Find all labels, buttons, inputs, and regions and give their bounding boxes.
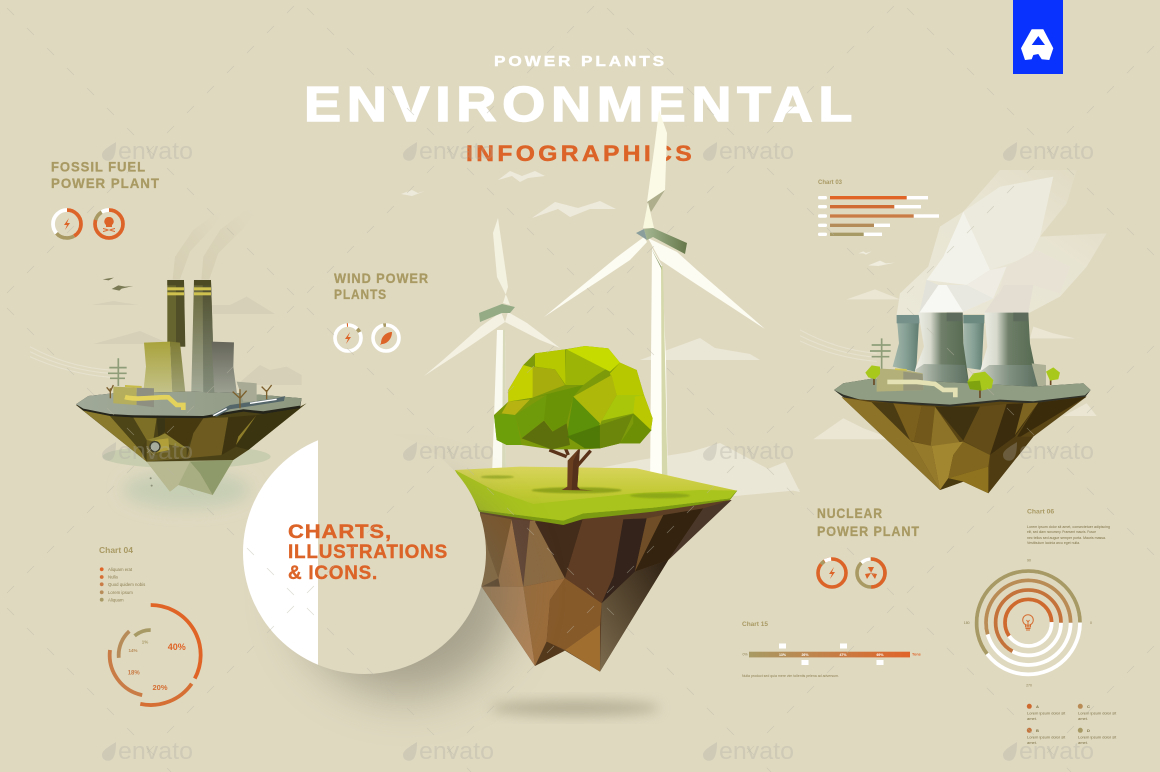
- rings: [977, 571, 1080, 674]
- arcs: [110, 605, 201, 705]
- callout text: ILLUSTRATIONS: [288, 541, 448, 563]
- bare trees: [107, 385, 272, 408]
- arc labels: 18%: [128, 670, 140, 676]
- legend: Lorem ipsum dolor sit: [1027, 734, 1066, 740]
- clouds: [813, 289, 1097, 439]
- rock facets: [83, 408, 300, 462]
- heading: wind power plants: WIND POWER: [334, 270, 429, 286]
- pylon: [108, 358, 127, 386]
- watermark: envato: envato: [118, 138, 193, 165]
- legend: Aliquam erat: [108, 567, 133, 572]
- legend: D: [1087, 728, 1090, 733]
- background mountains: [92, 297, 302, 385]
- legend: Lorem ipsum: [108, 590, 133, 595]
- subtitle: infographics: INFOGRAPHICS: [466, 141, 695, 166]
- ground shadows: [481, 475, 690, 498]
- smoke: [173, 205, 260, 279]
- legend: B: [1036, 728, 1039, 733]
- chart 04: radial segments: Chart 04: [99, 545, 133, 555]
- callout circle: [243, 431, 486, 674]
- legend: amet.: [1027, 716, 1037, 721]
- right floating island: nuclear: [800, 170, 1107, 493]
- distant birds: [401, 171, 616, 218]
- bar tracks: [818, 196, 939, 236]
- bar values: 47%: [839, 653, 847, 657]
- fossil fuel donut icons: [53, 210, 123, 238]
- arc labels: 14%: [128, 648, 138, 653]
- watermark: envato: envato: [118, 738, 193, 765]
- logo badge: [1013, 0, 1063, 74]
- chart 15: gradient bar: Nulla product sed quia mere vim tollentis pelena ad adversum.: [742, 673, 839, 678]
- title block: [304, 53, 858, 166]
- buildings: [113, 382, 257, 407]
- legend: amet.: [1078, 716, 1088, 721]
- heading: fossil fuel power plant: FOSSIL FUEL: [51, 158, 146, 174]
- chart 06: concentric rings: [964, 508, 1117, 745]
- chart 15: gradient bar: 0%: [742, 652, 748, 656]
- callout text: [288, 521, 448, 584]
- bar values: [779, 653, 884, 657]
- island shadow: [490, 700, 660, 716]
- island plate: [834, 378, 1091, 407]
- road: [212, 396, 285, 417]
- legend: Lorem ipsum dolor sit: [1078, 710, 1117, 716]
- wind lines: [30, 347, 110, 377]
- description: nec tellus sed augue semper porta. Mauris massa.: [1027, 535, 1106, 540]
- watermark: envato: envato: [719, 438, 794, 465]
- bar values: 69%: [876, 653, 884, 657]
- chart 06: concentric rings: Chart 06: [1027, 508, 1054, 516]
- watermark: envato: envato: [1019, 738, 1094, 765]
- rock facets: [842, 397, 1087, 493]
- chart 03: horizontal bars: Chart 03: [818, 180, 843, 186]
- bar values: [830, 196, 914, 236]
- island plate: [76, 392, 307, 462]
- watermark: envato: envato: [419, 738, 494, 765]
- heading: nuclear power plant: [817, 505, 920, 539]
- wind lines: [800, 330, 877, 361]
- legend: Lorem ipsum dolor sit: [1078, 734, 1117, 740]
- heading: wind power plants: PLANTS: [334, 286, 387, 302]
- large wind turbine: [544, 110, 765, 497]
- left floating island: fossil fuel: [30, 205, 307, 508]
- arc labels: 1%: [142, 640, 148, 644]
- arc labels: 20%: [152, 683, 168, 692]
- central floating island: [455, 346, 737, 672]
- legend: Lorem ipsum dolor sit: [1027, 710, 1066, 716]
- heading: fossil fuel power plant: [51, 158, 160, 191]
- watermark: envato: envato: [419, 138, 494, 165]
- drain pipe: [148, 438, 169, 460]
- legend: [1027, 704, 1117, 745]
- subtitle: power plants: POWER PLANTS: [494, 53, 667, 70]
- chart 15: gradient bar: Chart 15: [742, 621, 768, 628]
- bar markers: [779, 644, 884, 665]
- chimneys: [167, 280, 215, 405]
- axis labels: 270: [1026, 684, 1032, 688]
- pipe: [887, 382, 955, 397]
- watermark: envato: envato: [1019, 438, 1094, 465]
- small wind turbine: [424, 218, 560, 477]
- birds: [858, 251, 895, 266]
- legend: amet.: [1027, 740, 1037, 745]
- chart 04: radial segments: [99, 545, 201, 705]
- legend: Nulla: [108, 575, 118, 580]
- island rock: [480, 500, 732, 672]
- legend: [100, 567, 145, 602]
- description: Vestibulum lacinia arcu eget nulla.: [1027, 540, 1080, 545]
- watermark: envato: envato: [1019, 138, 1094, 165]
- wind donut icons: [335, 325, 399, 351]
- chart 15: gradient bar: Tons: [912, 652, 921, 656]
- icon: light bulb: [1023, 615, 1033, 630]
- heading: nuclear power plant: POWER PLANT: [817, 523, 920, 539]
- description: [1027, 524, 1110, 545]
- legend: Quod quidem nobis: [108, 582, 145, 587]
- island grass: [455, 467, 737, 525]
- callout text: CHARTS,: [288, 521, 392, 543]
- legend: amet.: [1078, 740, 1088, 745]
- axis labels: 90: [1027, 558, 1031, 562]
- cooling towers: [893, 313, 1046, 392]
- chart 15: gradient bar: [742, 621, 921, 678]
- bar values: 13%: [779, 653, 787, 657]
- axis labels: 180: [964, 621, 970, 625]
- legend: C: [1087, 704, 1090, 709]
- watermark: envato: [102, 138, 1094, 765]
- arc labels: [128, 640, 186, 692]
- watermark: envato: envato: [719, 138, 794, 165]
- heading: fossil fuel power plant: POWER PLANT: [51, 175, 160, 191]
- nuclear donut icons: [818, 559, 885, 587]
- description: Lorem ipsum dolor sit amet, consectetuer adipiscing: [1027, 524, 1110, 529]
- plant building: [877, 368, 923, 392]
- main title: ENVIRONMENTAL: [304, 78, 858, 132]
- arc labels: 40%: [168, 642, 186, 652]
- watermark: envato: envato: [118, 438, 193, 465]
- birds: [103, 278, 133, 291]
- chart 03: horizontal bars: [818, 180, 939, 236]
- heading: nuclear power plant: NUCLEAR: [817, 505, 883, 521]
- tree: [494, 346, 653, 491]
- central clouds: [600, 338, 800, 496]
- steam plume: [897, 170, 1107, 315]
- legend: Aliquam: [108, 597, 124, 602]
- watermark: envato: envato: [419, 438, 494, 465]
- axis labels: 0: [1090, 621, 1092, 625]
- callout shadow: [295, 485, 515, 695]
- description: elit, sed diam nonummy. Praesent mauris. Fusce: [1027, 529, 1097, 534]
- cooling towers: [143, 342, 238, 405]
- yellow pipe: [125, 397, 183, 410]
- axis labels: [964, 558, 1092, 688]
- watermark: envato: envato: [719, 738, 794, 765]
- trees: [865, 365, 1060, 398]
- pylon: [870, 338, 891, 369]
- water reflection: [103, 445, 271, 508]
- bar values: 26%: [801, 653, 809, 657]
- heading: wind power plants: [334, 270, 429, 302]
- callout text: & ICONS.: [288, 562, 378, 584]
- legend: A: [1036, 704, 1039, 709]
